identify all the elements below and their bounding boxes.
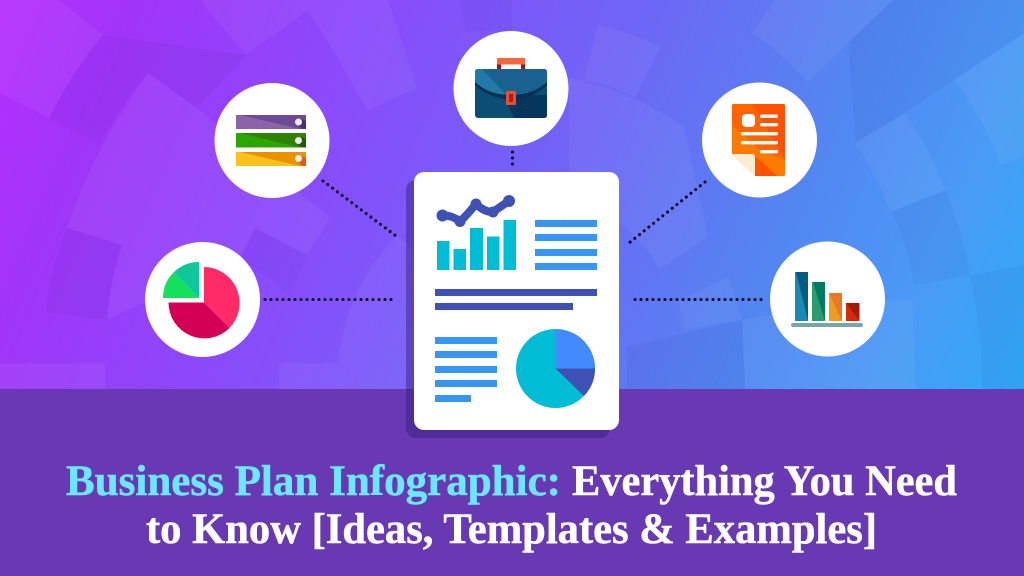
bar 4 <box>846 303 860 321</box>
case body <box>475 69 547 118</box>
title <box>66 458 957 553</box>
purple bar <box>236 115 306 129</box>
handle <box>497 58 525 70</box>
green bar <box>236 133 306 148</box>
text lines: lower left <box>435 337 497 402</box>
base line <box>791 323 863 327</box>
folded corner <box>732 154 755 176</box>
icon: stacked server bars badge <box>214 83 330 198</box>
icon: document badge <box>702 82 817 198</box>
red pie <box>168 267 240 338</box>
panel: central report document <box>406 172 619 438</box>
document shadow <box>406 180 610 438</box>
gradient background <box>0 0 1024 390</box>
chart: trend line <box>436 195 515 227</box>
yellow bar <box>236 152 306 166</box>
title line two: to Know [Ideas, Templates & Examples] <box>146 506 877 553</box>
chart: document pie <box>516 329 595 408</box>
bottom title band <box>0 389 1024 576</box>
icon: descending bar chart badge <box>770 242 885 356</box>
title line one: Everything You Need <box>572 458 957 505</box>
portrait and text lines <box>741 114 778 153</box>
case flap <box>475 69 547 99</box>
text lines: upper right <box>535 220 597 270</box>
green slice <box>163 262 199 298</box>
icon: pie chart badge <box>145 242 260 357</box>
bar 1 <box>795 272 808 321</box>
icon: briefcase badge <box>454 31 568 146</box>
text lines: dark divider <box>435 289 597 310</box>
background mosaic <box>0 0 1024 389</box>
dotted connector lines <box>265 152 763 300</box>
chart: teal bars <box>437 220 516 270</box>
orange sheet <box>732 104 785 176</box>
document page <box>414 172 619 430</box>
clasp <box>506 91 516 105</box>
title highlight: Business Plan Infographic: <box>66 458 561 505</box>
bar 3 <box>829 293 842 321</box>
bar 2 <box>812 282 825 321</box>
